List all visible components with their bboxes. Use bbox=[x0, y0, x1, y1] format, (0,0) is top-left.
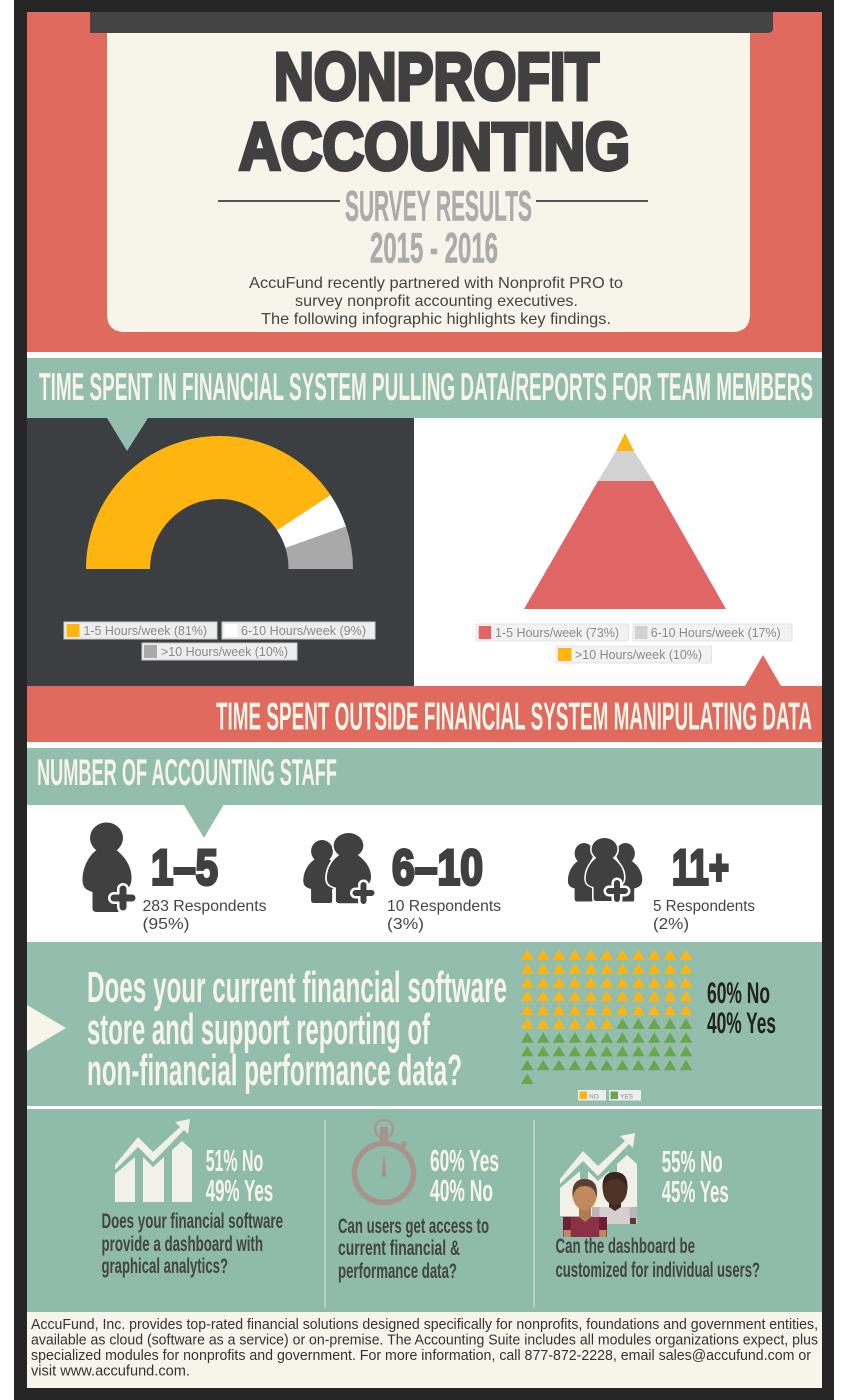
staff figure: 1-5: 1–5 bbox=[151, 840, 218, 896]
staff figure: 1-5: (95%) bbox=[142, 916, 190, 933]
question text: non-financial performance data? bbox=[87, 1046, 462, 1095]
question text bbox=[87, 963, 507, 1095]
pyramid chart bbox=[524, 433, 726, 609]
question: access bbox=[338, 1215, 489, 1283]
icon: single person with plus bbox=[82, 822, 132, 912]
panel: dashboard questions bbox=[27, 1109, 822, 1312]
question: dashboard: provide a dashboard with bbox=[102, 1233, 263, 1256]
staff figure: 6-10: 10 Respondents bbox=[387, 898, 501, 915]
question text: Does your current financial software bbox=[87, 963, 507, 1012]
results: access: 40% No bbox=[430, 1173, 493, 1208]
legend: right chart: >10 Hours/week (10%) bbox=[575, 647, 702, 662]
results: access: 60% Yes bbox=[430, 1143, 499, 1178]
staff figure: 1-5 bbox=[142, 840, 266, 933]
icon: stopwatch bbox=[354, 1120, 414, 1202]
results: customized: 45% Yes bbox=[662, 1174, 729, 1209]
legend: no / yes bbox=[578, 1090, 641, 1100]
title: NONPROFIT bbox=[274, 40, 599, 115]
question: customized bbox=[556, 1235, 760, 1282]
arrow bbox=[27, 1005, 66, 1051]
legend: left chart bbox=[64, 622, 375, 660]
staff figure: 6-10 bbox=[387, 840, 501, 933]
results: dashboard bbox=[206, 1143, 273, 1208]
footer: available as cloud (software as a service) or on-premise. The Accounting Suite includes all modules organizations expect, plus bbox=[31, 1332, 818, 1348]
intro text bbox=[249, 275, 623, 328]
panel: time in financial system chart bbox=[27, 418, 792, 686]
question: customized: Can the dashboard be bbox=[556, 1235, 695, 1258]
footer: AccuFund, Inc. provides top-rated financial solutions designed specifically for nonprofits, foundations and government entities, bbox=[31, 1317, 818, 1333]
question: dashboard bbox=[102, 1210, 283, 1278]
results: customized: 55% No bbox=[662, 1144, 723, 1179]
results: dashboard: 49% Yes bbox=[206, 1173, 273, 1208]
header dark bar bbox=[90, 12, 773, 33]
staff figure: 6-10: 6–10 bbox=[392, 840, 483, 896]
panel: non-financial performance data bbox=[27, 942, 822, 1106]
icon: two people with plus bbox=[303, 833, 372, 903]
icon: chart with two people bbox=[560, 1133, 637, 1237]
question: access: current financial & bbox=[338, 1237, 460, 1260]
icon: group of people with plus bbox=[568, 838, 642, 902]
subtitle: survey results bbox=[218, 182, 648, 272]
heading band: number of accounting staff: NUMBER OF ACCOUNTING STAFF bbox=[37, 752, 337, 793]
results: customized bbox=[662, 1144, 729, 1209]
results: dashboard: 51% No bbox=[206, 1143, 263, 1178]
title bbox=[239, 40, 630, 185]
intro text: AccuFund recently partnered with Nonprofit PRO to bbox=[249, 275, 623, 292]
result figures: 60% No bbox=[707, 977, 770, 1010]
person: right bbox=[592, 1172, 637, 1224]
legend: left chart: 1-5 Hours/week (81%) bbox=[84, 623, 207, 638]
legend: no / yes: YES bbox=[620, 1094, 634, 1100]
question: access: performance data? bbox=[338, 1260, 457, 1283]
heading band: number of accounting staff bbox=[27, 748, 822, 838]
person: left bbox=[563, 1179, 607, 1237]
legend: right chart bbox=[476, 624, 792, 663]
icon: bar chart with arrow bbox=[115, 1119, 192, 1202]
heading band: time spent outside financial system bbox=[27, 655, 822, 742]
staff figure: 11+ bbox=[653, 840, 755, 933]
triangle pictogram chart bbox=[521, 950, 692, 1084]
legend: left chart: >10 Hours/week (10%) bbox=[161, 644, 288, 659]
footer: specialized modules for nonprofits and government. For more information, call 877-872-2228, email sales@accufund.com or bbox=[31, 1348, 811, 1364]
staff figure: 11+: 5 Respondents bbox=[653, 898, 755, 915]
header paper card bbox=[107, 33, 750, 332]
question: dashboard: graphical analytics? bbox=[102, 1255, 228, 1278]
question text: store and support reporting of bbox=[87, 1005, 430, 1054]
staff figure: 1-5: 283 Respondents bbox=[142, 898, 266, 915]
staff figure: 11+: (2%) bbox=[653, 916, 689, 933]
staff figure: 6-10: (3%) bbox=[387, 916, 424, 933]
subtitle: survey results: 2015 - 2016 bbox=[370, 224, 498, 272]
legend: right chart: 6-10 Hours/week (17%) bbox=[651, 625, 781, 640]
legend: right chart: 1-5 Hours/week (73%) bbox=[495, 625, 619, 640]
intro text: The following infographic highlights key findings. bbox=[261, 311, 611, 328]
question: dashboard: Does your financial software bbox=[102, 1210, 283, 1233]
donut chart bbox=[86, 436, 353, 569]
title: ACCOUNTING bbox=[239, 110, 630, 185]
subtitle: survey results: SURVEY RESULTS bbox=[345, 182, 532, 230]
staff figure: 11+: 11+ bbox=[672, 840, 729, 896]
footer: visit www.accufund.com. bbox=[31, 1364, 190, 1380]
intro text: survey nonprofit accounting executives. bbox=[295, 293, 578, 310]
result figures bbox=[707, 977, 776, 1040]
result figures: 40% Yes bbox=[707, 1007, 776, 1040]
legend: no / yes: NO bbox=[589, 1094, 599, 1100]
legend: left chart: 6-10 Hours/week (9%) bbox=[241, 623, 366, 638]
footer bbox=[27, 1312, 822, 1388]
panel: staff counts bbox=[82, 822, 755, 933]
panel: header bbox=[27, 12, 822, 352]
heading band: time spent in financial system bbox=[27, 358, 822, 451]
question: access: Can users get access to bbox=[338, 1215, 489, 1238]
results: access bbox=[430, 1143, 499, 1208]
